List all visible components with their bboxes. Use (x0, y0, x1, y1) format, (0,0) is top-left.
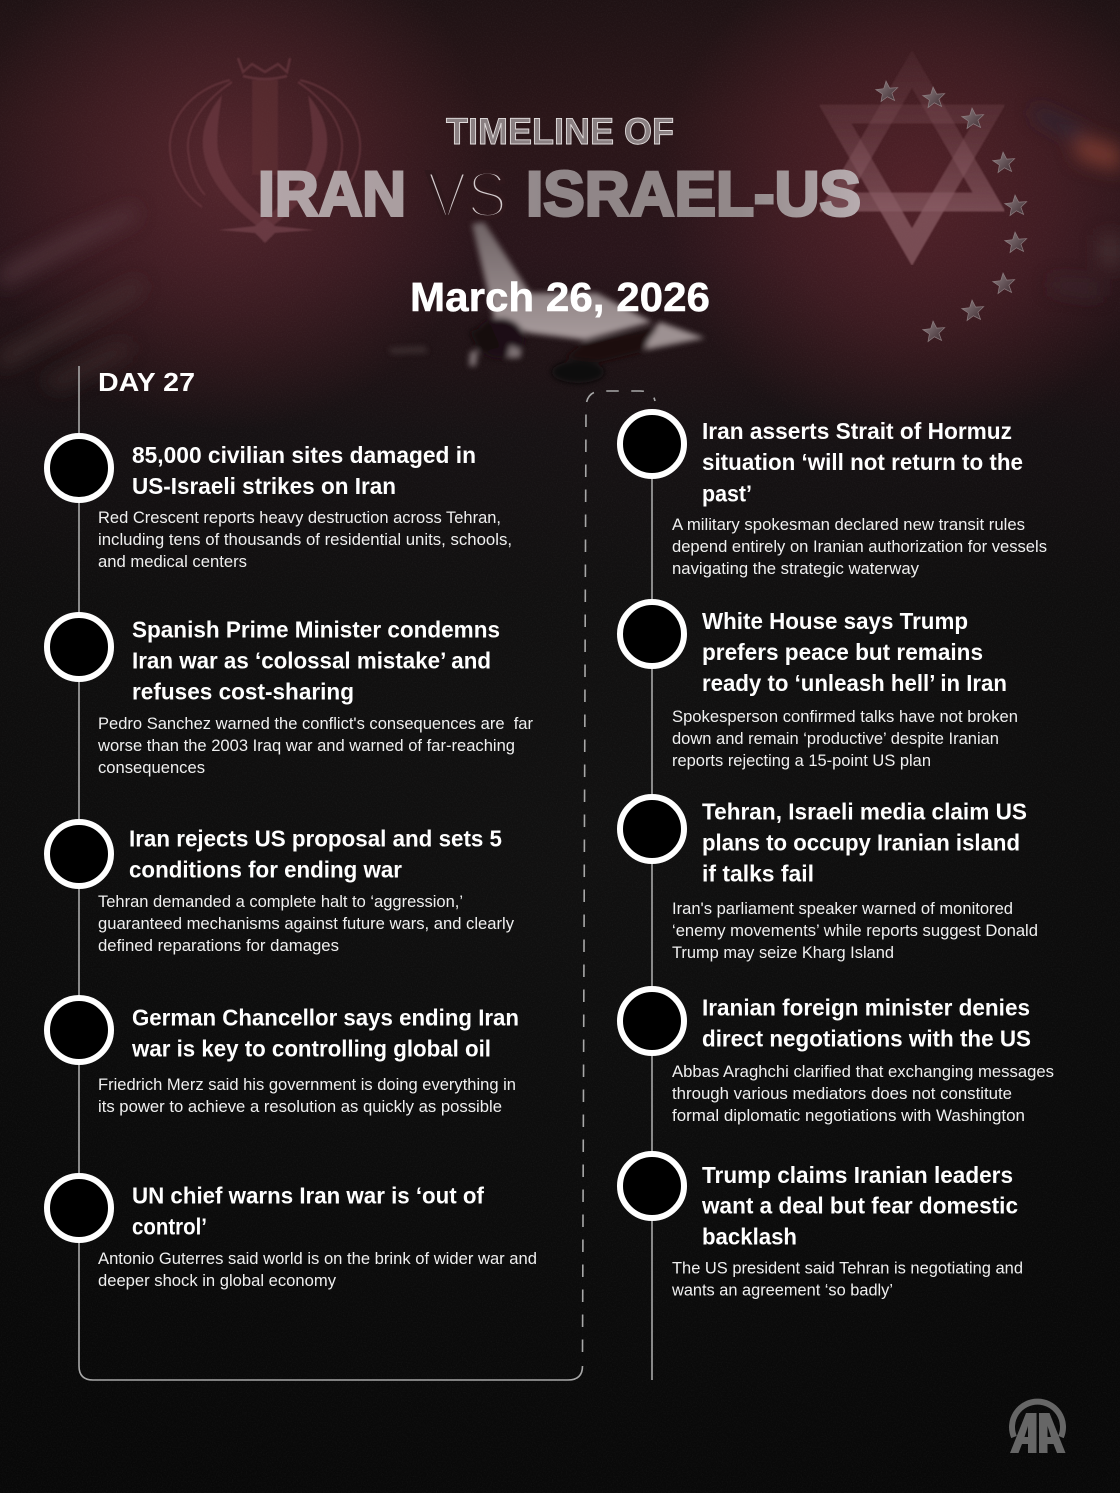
timeline connector: dashed return line (582, 391, 655, 1352)
description: through various mediators does not constitute (672, 1085, 1012, 1103)
heading (132, 1182, 484, 1240)
description: Trump may seize Kharg Island (672, 944, 894, 962)
description: Pedro Sanchez warned the conflict's consequences are far (98, 715, 533, 733)
heading (132, 442, 476, 499)
heading (702, 418, 1023, 506)
description (672, 900, 1038, 962)
date: March 26, 2026 (410, 274, 710, 320)
heading: US-Israeli strikes on Iran (132, 473, 396, 499)
heading: Iran rejects US proposal and sets 5 (129, 826, 502, 852)
marker (47, 998, 111, 1062)
event: White House (620, 602, 1018, 770)
heading: Spanish Prime Minister condemns (132, 616, 500, 642)
heading: Iran war as ‘colossal mistake’ and (132, 648, 491, 674)
decorative streaks (0, 105, 1120, 392)
right half (262, 80, 360, 232)
heading: German Chancellor says ending Iran (132, 1004, 519, 1030)
heading (132, 616, 500, 704)
description: its power to achieve a resolution as quickly as possible (98, 1098, 502, 1116)
marker (620, 797, 684, 861)
marker (620, 1154, 684, 1218)
title line: timeline of: TIMELINE OF (446, 111, 674, 152)
heading (131, 1004, 519, 1062)
event: Iranian island (620, 797, 1038, 962)
center column (252, 80, 278, 175)
description: depend entirely on Iranian authorization for vessels (672, 538, 1047, 556)
description (98, 1250, 537, 1290)
event: Strait of Hormuz (620, 412, 1047, 578)
event: foreign minister (620, 989, 1054, 1125)
heading: Iranian foreign minister denies (702, 994, 1030, 1020)
description (98, 893, 515, 955)
day label: DAY 27 (98, 367, 195, 397)
heading: if talks fail (702, 860, 814, 886)
title (258, 111, 861, 231)
crown (238, 58, 290, 79)
description: guaranteed mechanisms against future wars, and clearly (98, 915, 515, 933)
description: ‘enemy movements’ while reports suggest Donald (672, 922, 1038, 940)
heading (129, 826, 502, 882)
description: Spokesperson confirmed talks have not broken (672, 708, 1018, 726)
heading: plans to occupy Iranian island (702, 830, 1020, 856)
timeline connector: right solid line (651, 470, 653, 1380)
title word: vs: VS (427, 158, 507, 231)
description (672, 1063, 1054, 1125)
marker (620, 989, 684, 1053)
title word: Israel-US: ISRAEL-US (526, 160, 861, 230)
marker (47, 615, 111, 679)
description: worse than the 2003 Iraq war and warned of far-reaching (97, 737, 515, 755)
left half (170, 80, 268, 232)
description: Tehran demanded a complete halt to ‘aggression,’ (98, 893, 463, 911)
icon: AA logo (1010, 1402, 1066, 1453)
description: Red Crescent reports heavy destruction across Tehran, (98, 509, 501, 527)
description: reports rejecting a 15-point US plan (672, 752, 931, 770)
marker (47, 436, 111, 500)
description: wants an agreement ‘so badly’ (671, 1282, 893, 1300)
heading: Tehran, Israeli media claim US (702, 798, 1027, 824)
icon: star of David (835, 69, 989, 247)
heading: control’ (132, 1214, 207, 1240)
description (98, 509, 512, 571)
event: Spanish Prime Minister (47, 615, 533, 777)
description: navigating the strategic waterway (672, 560, 920, 578)
marker (47, 822, 111, 886)
description (97, 715, 533, 777)
description: Antonio Guterres said world is on the brink of wider war and (98, 1250, 537, 1268)
description: down and remain ‘productive’ despite Iranian (672, 730, 999, 748)
event: German Chancellor (47, 998, 519, 1116)
description: deeper shock in global economy (98, 1272, 337, 1290)
heading: backlash (702, 1224, 797, 1250)
event: Iran rejects US proposal (47, 822, 515, 955)
title word: Iran: IRAN (258, 160, 406, 230)
description: Friedrich Merz said his government is doing everything in (98, 1076, 516, 1094)
heading: ready to ‘unleash hell’ in Iran (702, 670, 1007, 696)
description: including tens of thousands of residential units, schools, (98, 531, 512, 549)
description: consequences (98, 759, 205, 777)
description (672, 708, 1018, 770)
heading (702, 608, 1007, 696)
heading: situation ‘will not return to the (702, 449, 1023, 475)
heading: want a deal but fear domestic (701, 1192, 1018, 1218)
heading: war is key to controlling global oil (131, 1036, 491, 1062)
description: defined reparations for damages (98, 937, 339, 955)
heading: White House says Trump (702, 608, 968, 634)
icon: Iran emblem (170, 58, 360, 243)
base star (218, 218, 315, 243)
event: Trump claims (620, 1154, 1023, 1300)
marker (620, 602, 684, 666)
description: Abbas Araghchi clarified that exchanging messages (672, 1063, 1054, 1081)
heading (702, 994, 1031, 1052)
description: Iran's parliament speaker warned of monitored (672, 900, 1013, 918)
description: formal diplomatic negotiations with Washington (672, 1107, 1025, 1125)
event: UN chief (47, 1176, 537, 1290)
timeline connector: left solid line (79, 366, 582, 1380)
illustration: fighter jet (388, 222, 705, 383)
description: A military spokesman declared new transit rules (672, 516, 1025, 534)
heading: direct negotiations with the US (702, 1026, 1031, 1052)
description (671, 1260, 1023, 1300)
heading: past’ (702, 480, 752, 506)
description (98, 1076, 516, 1116)
heading: conditions for ending war (129, 856, 402, 882)
heading: refuses cost-sharing (132, 678, 354, 704)
marker (620, 412, 684, 476)
heading: Iran asserts Strait of Hormuz (702, 418, 1012, 444)
icon: ring of stars (875, 80, 1028, 342)
heading: 85,000 civilian sites damaged in (132, 442, 476, 468)
description: The US president said Tehran is negotiating and (672, 1260, 1023, 1278)
heading: Trump claims Iranian leaders (702, 1162, 1013, 1188)
description (672, 516, 1047, 578)
event: 85,000 civilian sites (47, 436, 512, 571)
heading (701, 1162, 1018, 1250)
heading: prefers peace but remains (702, 639, 983, 665)
marker (47, 1176, 111, 1240)
description: and medical centers (98, 553, 247, 571)
heading (702, 798, 1027, 886)
heading: UN chief warns Iran war is ‘out of (132, 1182, 484, 1208)
